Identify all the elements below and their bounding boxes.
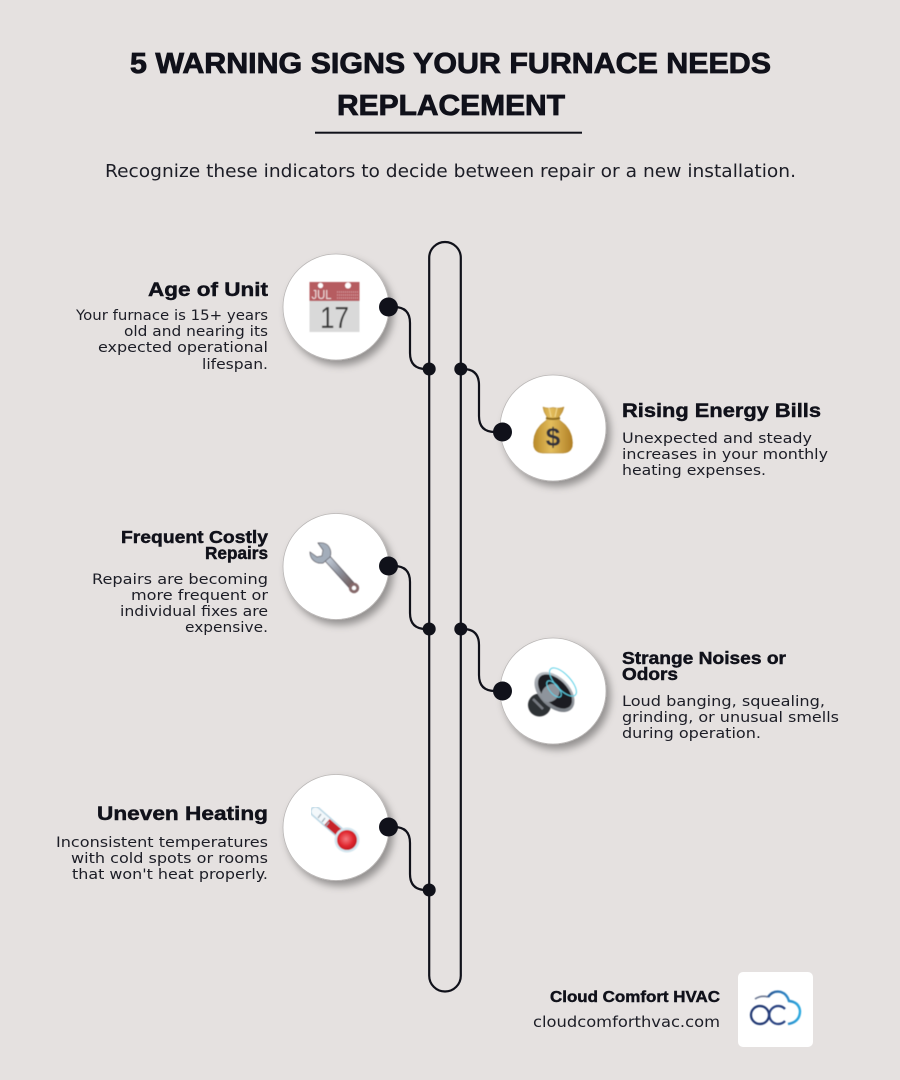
text: rising energy bills: heating expenses. bbox=[622, 463, 766, 479]
connector: uneven heating bbox=[388, 827, 436, 896]
step: strange noises or odors bbox=[454, 622, 839, 744]
connector: rising energy bills bbox=[454, 362, 501, 432]
heading: frequent costly repairs: Repairs bbox=[205, 543, 268, 563]
text: age of unit: Your furnace is 15+ years bbox=[75, 308, 268, 324]
text: frequent costly repairs: Repairs are becoming bbox=[92, 572, 268, 588]
text: age of unit: expected operational bbox=[98, 340, 268, 356]
text: frequent costly repairs: expensive. bbox=[185, 620, 268, 636]
footer brand name: Cloud Comfort HVAC bbox=[550, 989, 720, 1006]
icon disc: calendar: 17 bbox=[320, 300, 349, 335]
icon disc: money bag bbox=[500, 375, 606, 481]
text: strange noises or odors: Loud banging, squealing, bbox=[622, 694, 825, 710]
text: uneven heating: with cold spots or rooms bbox=[71, 851, 268, 867]
subtitle: Recognize these indicators to decide between repair or a new installation. bbox=[105, 161, 796, 182]
heading: frequent costly repairs: Frequent Costly bbox=[121, 527, 268, 547]
text: uneven heating bbox=[56, 835, 268, 883]
step: uneven heating bbox=[56, 774, 436, 896]
title: REPLACEMENT bbox=[337, 90, 566, 122]
text: age of unit bbox=[75, 308, 268, 373]
icon disc: calendar: JUL bbox=[312, 288, 332, 302]
title bbox=[130, 48, 771, 122]
text: uneven heating: Inconsistent temperatures bbox=[56, 835, 268, 851]
text: strange noises or odors: during operation. bbox=[622, 726, 761, 742]
icon disc: thermometer bbox=[283, 774, 389, 880]
text: strange noises or odors: grinding, or unusual smells bbox=[622, 710, 839, 726]
text: frequent costly repairs bbox=[92, 572, 268, 636]
text: rising energy bills: Unexpected and steady bbox=[622, 431, 812, 447]
dot: frequent costly repairs bbox=[379, 556, 398, 576]
text: age of unit: lifespan. bbox=[202, 357, 268, 373]
icon disc: money bag: $ bbox=[546, 422, 561, 452]
connector: age of unit bbox=[388, 307, 436, 376]
connector: strange noises or odors bbox=[454, 622, 501, 691]
icon disc: wrench bbox=[283, 514, 389, 620]
text: rising energy bills: increases in your monthly bbox=[622, 447, 828, 463]
text: age of unit: old and nearing its bbox=[124, 324, 268, 340]
dot: rising energy bills bbox=[493, 422, 512, 442]
heading: strange noises or odors: Odors bbox=[622, 664, 678, 684]
footer website: cloudcomforthvac.com bbox=[533, 1013, 720, 1031]
dot: uneven heating bbox=[379, 818, 398, 836]
title: 5 WARNING SIGNS YOUR FURNACE NEEDS bbox=[130, 48, 771, 80]
text: rising energy bills bbox=[622, 431, 828, 479]
heading: rising energy bills: Rising Energy Bills bbox=[622, 400, 821, 422]
logo bbox=[738, 972, 813, 1047]
heading: frequent costly repairs bbox=[121, 527, 268, 563]
text: strange noises or odors bbox=[622, 694, 839, 742]
central timeline track bbox=[429, 242, 461, 992]
connector: frequent costly repairs bbox=[388, 566, 436, 636]
dot: strange noises or odors bbox=[493, 682, 512, 700]
text: uneven heating: that won't heat properly. bbox=[72, 867, 268, 883]
heading: strange noises or odors: Strange Noises or bbox=[622, 648, 786, 668]
dot: age of unit bbox=[379, 298, 398, 316]
step: age of unit bbox=[75, 254, 436, 376]
icon disc: calendar bbox=[283, 254, 389, 360]
heading: age of unit: Age of Unit bbox=[148, 279, 269, 301]
heading: uneven heating: Uneven Heating bbox=[97, 803, 268, 825]
step: frequent costly repairs bbox=[92, 514, 436, 636]
text: frequent costly repairs: more frequent or bbox=[131, 588, 268, 604]
step: rising energy bills bbox=[454, 362, 828, 481]
text: frequent costly repairs: individual fixes are bbox=[120, 604, 268, 620]
heading: strange noises or odors bbox=[622, 648, 786, 684]
icon disc: speaker bbox=[500, 638, 606, 744]
